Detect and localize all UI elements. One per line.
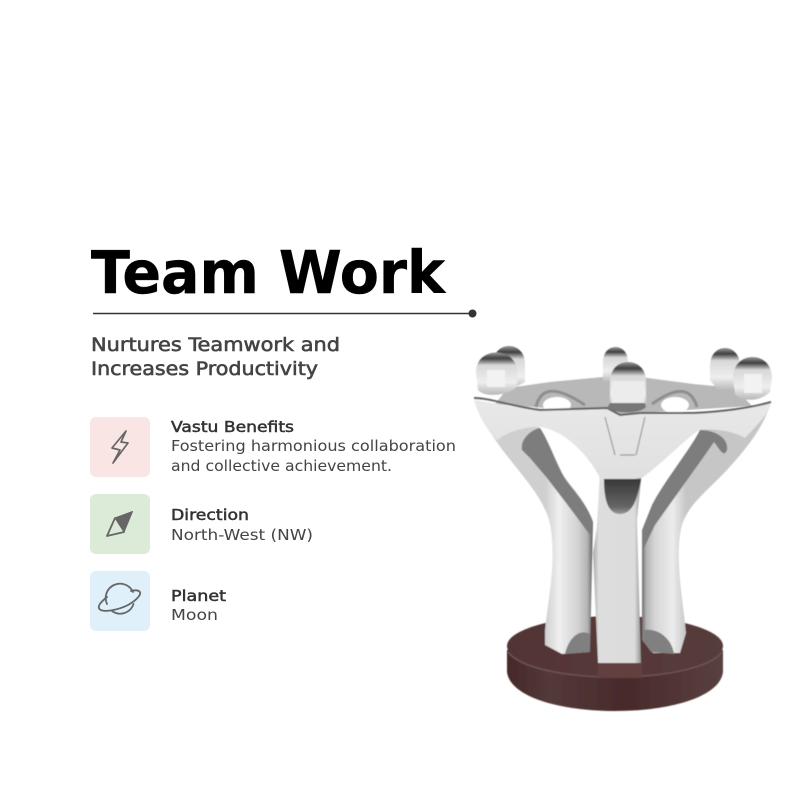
center figure torso shadow <box>604 479 641 514</box>
subheading <box>91 334 340 380</box>
wooden base <box>507 616 723 711</box>
front right head <box>733 357 772 400</box>
dark rim line <box>474 398 771 415</box>
text block: direction: North-West (NW) <box>171 526 313 544</box>
right figure leg <box>642 405 770 653</box>
subheading: Increases Productivity <box>91 358 318 380</box>
text block: vastu benefits: Vastu Benefits <box>171 418 294 436</box>
text block: planet <box>171 587 226 624</box>
title: Team Work <box>91 238 447 307</box>
center figure leg <box>593 470 642 663</box>
product: metal team figurine on wooden base <box>474 346 772 711</box>
rim openings <box>543 397 689 413</box>
front left head <box>476 352 517 395</box>
icon: lightning bolt on pink tile <box>90 417 150 477</box>
right leg inner shading <box>642 430 727 552</box>
text block: vastu benefits: and collective achievement. <box>171 457 392 475</box>
icon: compass on green tile <box>90 494 150 554</box>
back heads <box>493 346 740 390</box>
icon: planet on blue tile <box>90 571 150 631</box>
text block: planet: Planet <box>171 587 226 605</box>
rim arches <box>536 391 697 407</box>
main body and arms <box>474 400 771 478</box>
title underline with dot <box>93 310 476 318</box>
torso detail lines <box>605 417 645 455</box>
subheading: Nurtures Teamwork and <box>91 334 340 356</box>
text block: direction: Direction <box>171 506 249 524</box>
text block: direction <box>171 506 313 544</box>
text block: planet: Moon <box>171 606 218 624</box>
left figure leg <box>475 402 593 654</box>
front center head <box>607 362 646 412</box>
left leg inner shading <box>522 428 593 535</box>
text block: vastu benefits: Fostering harmonious collaboration <box>171 437 456 455</box>
text block: vastu benefits <box>171 418 456 475</box>
leg foot shadows <box>565 630 674 654</box>
back rim of figurine <box>495 377 752 414</box>
